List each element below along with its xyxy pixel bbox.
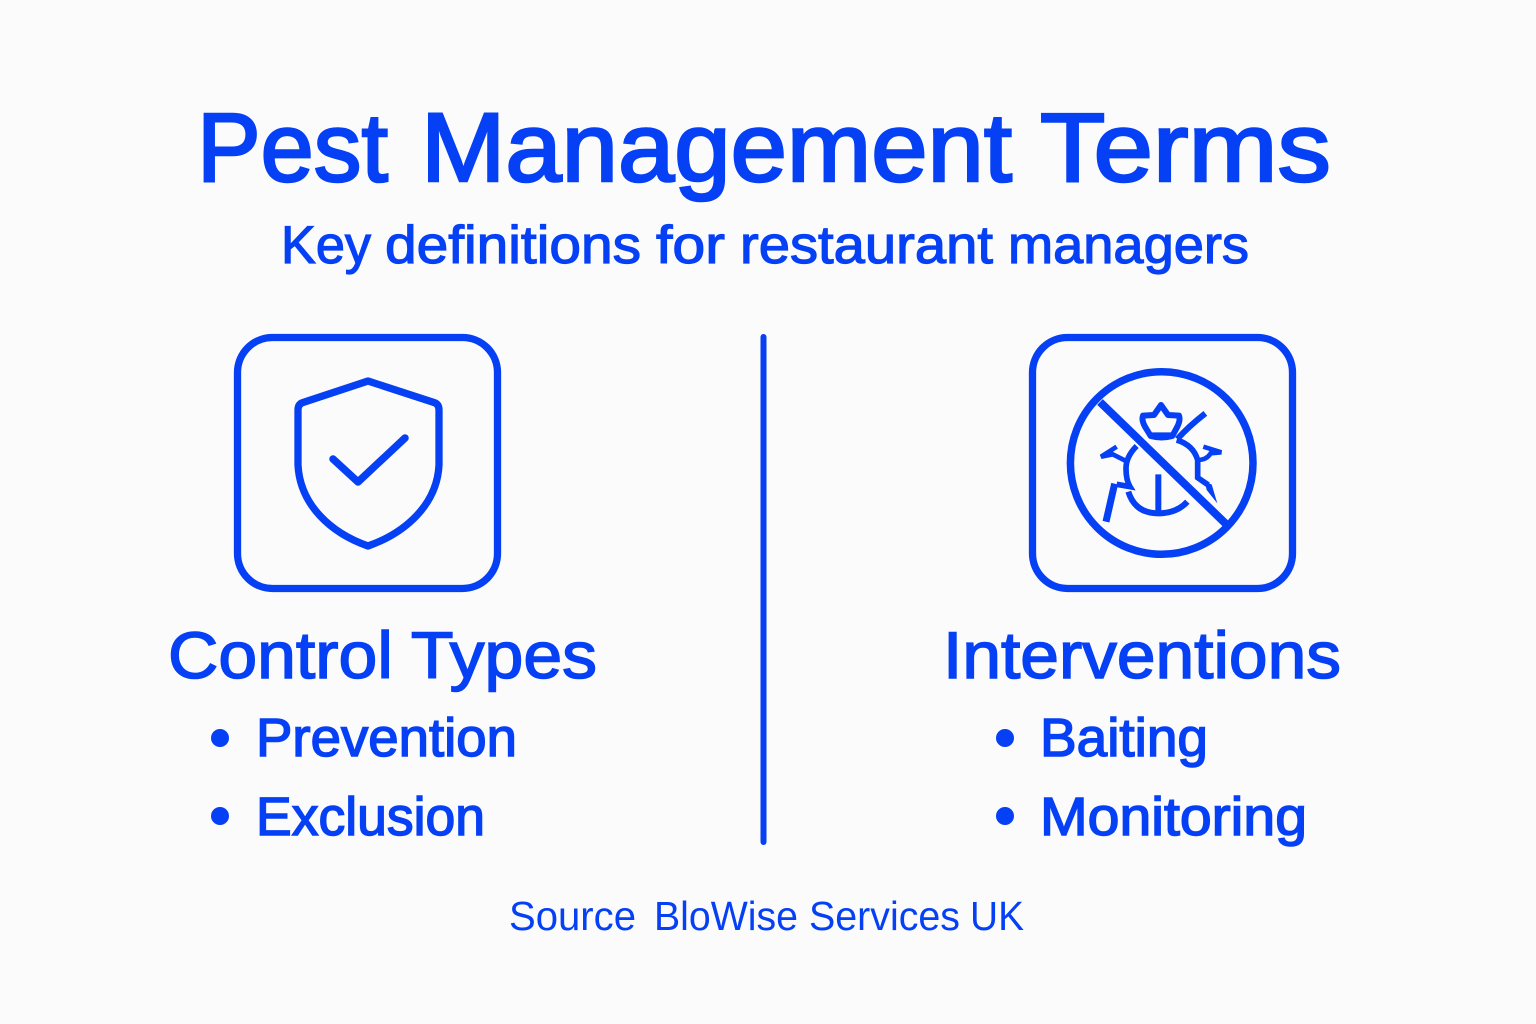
subtitle: Key bbox=[281, 216, 371, 275]
title bbox=[197, 93, 1331, 202]
list item: monitoring: Monitoring bbox=[1040, 787, 1307, 847]
heading: control types: Control Types bbox=[168, 618, 597, 692]
source note: Services bbox=[809, 893, 960, 939]
source note bbox=[509, 893, 1024, 939]
center divider bbox=[760, 337, 766, 842]
heading: interventions: Interventions bbox=[943, 618, 1341, 692]
icon: shield with check mark bbox=[238, 338, 498, 588]
title: Terms bbox=[1040, 93, 1331, 202]
list item: exclusion: Exclusion bbox=[256, 787, 485, 847]
panel: control types bbox=[168, 338, 597, 847]
list item: baiting: Baiting bbox=[1040, 708, 1208, 768]
source note: Source bbox=[509, 893, 636, 939]
title: Pest bbox=[197, 93, 388, 202]
list item: prevention: Prevention bbox=[256, 708, 517, 768]
source note: BloWise bbox=[654, 893, 798, 939]
icon: crossed-out bug bbox=[1032, 338, 1292, 588]
subtitle: for bbox=[656, 216, 725, 275]
title: Management bbox=[421, 93, 1012, 202]
subtitle bbox=[281, 216, 1249, 275]
subtitle: restaurant bbox=[740, 216, 993, 275]
subtitle: managers bbox=[1008, 216, 1249, 275]
panel: interventions bbox=[943, 338, 1341, 847]
source note: UK bbox=[970, 893, 1024, 939]
subtitle: definitions bbox=[385, 216, 641, 275]
